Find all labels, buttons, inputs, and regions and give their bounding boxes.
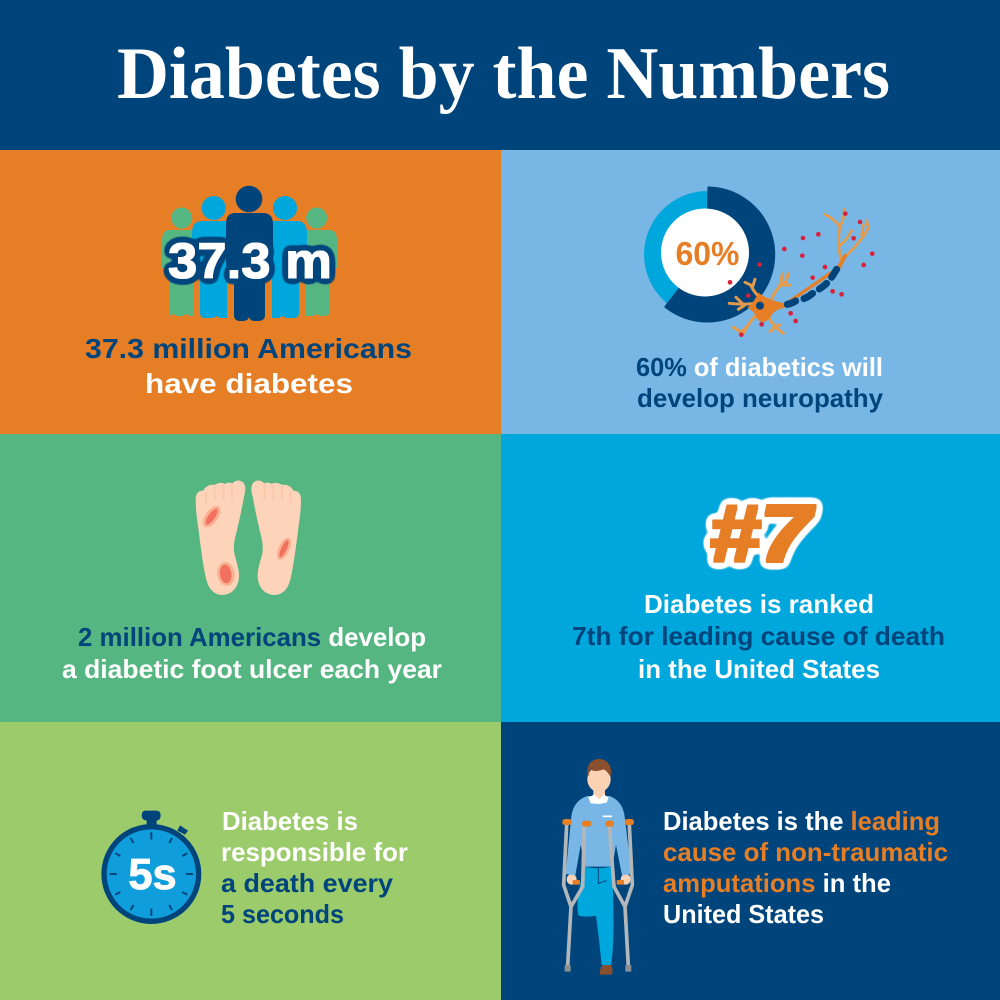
text: 60% of diabetics will develop neuropathy: 60% of diabetics will [636, 352, 883, 382]
text: Diabetes is responsible for a death every 5 seconds: responsible for [221, 837, 408, 867]
title: Diabetes by the Numbers [117, 33, 890, 115]
icon: stopwatch [101, 811, 201, 924]
hands [567, 874, 577, 885]
text: Diabetes is responsible for a death every 5 seconds: a death every [221, 868, 394, 898]
panel: death every 5 seconds [0, 722, 501, 1000]
icon: man on crutches [562, 759, 634, 975]
text: 60% of diabetics will develop neuropathy: develop neuropathy [637, 383, 884, 413]
text: 2 million Americans develop a diabetic foot ulcer each year: 2 million Americans develop [78, 622, 426, 652]
text: Diabetes is responsible for a death every 5 seconds: 5 seconds [221, 899, 344, 929]
icon: crowd of people [162, 186, 337, 321]
number: 60%: 60% [676, 235, 740, 272]
text: 60% of diabetics will develop neuropathy [636, 352, 884, 413]
text: Diabetes is ranked 7th for leading cause of death in the United States [572, 589, 945, 684]
text: leading cause of non-traumatic amputations: Diabetes is the leading [663, 806, 940, 836]
crutches [564, 825, 632, 966]
number: 37.3 m: 37.3 m [168, 233, 332, 289]
text: leading cause of non-traumatic amputations [663, 806, 948, 929]
icon: feet with ulcers [196, 480, 301, 595]
text: leading cause of non-traumatic amputations: amputations in the [663, 868, 891, 898]
panel: 37.3 million [0, 150, 501, 434]
header band [0, 0, 1000, 150]
text: leading cause of non-traumatic amputations: United States [663, 899, 824, 929]
text: Diabetes is ranked 7th for leading cause of death in the United States: in the United States [638, 654, 880, 684]
text: 37.3 million Americans have diabetes: have diabetes [145, 368, 353, 399]
number: 5s: 5s [128, 851, 177, 899]
panel: #7 cause of death [501, 434, 1000, 722]
panel: foot ulcers [0, 434, 501, 722]
text: 2 million Americans develop a diabetic foot ulcer each year: a diabetic foot ulcer each year [62, 654, 442, 684]
shirt [566, 796, 632, 875]
shoe [600, 965, 613, 975]
chart: 60% donut [644, 186, 775, 322]
text: Diabetes is responsible for a death every 5 seconds: Diabetes is [222, 806, 358, 836]
text: 37.3 million Americans have diabetes: 37.3 million Americans [85, 333, 412, 364]
number: #7: #7 [709, 489, 815, 578]
text: 37.3 million Americans have diabetes [85, 333, 412, 399]
text: leading cause of non-traumatic amputations: cause of non-traumatic [663, 837, 948, 867]
text: Diabetes is ranked 7th for leading cause of death in the United States: Diabetes is ranked [644, 589, 874, 619]
head [593, 785, 605, 802]
icon: neuron with damaged axon [728, 209, 875, 337]
trousers [577, 867, 613, 965]
text: Diabetes is responsible for a death every 5 seconds [221, 806, 408, 929]
panel: amputations [501, 722, 1000, 1000]
panel: 60% neuropathy [501, 150, 1000, 434]
text: Diabetes is ranked 7th for leading cause of death in the United States: 7th for leading cause of death [572, 621, 945, 651]
text: 2 million Americans develop a diabetic foot ulcer each year [62, 622, 442, 684]
